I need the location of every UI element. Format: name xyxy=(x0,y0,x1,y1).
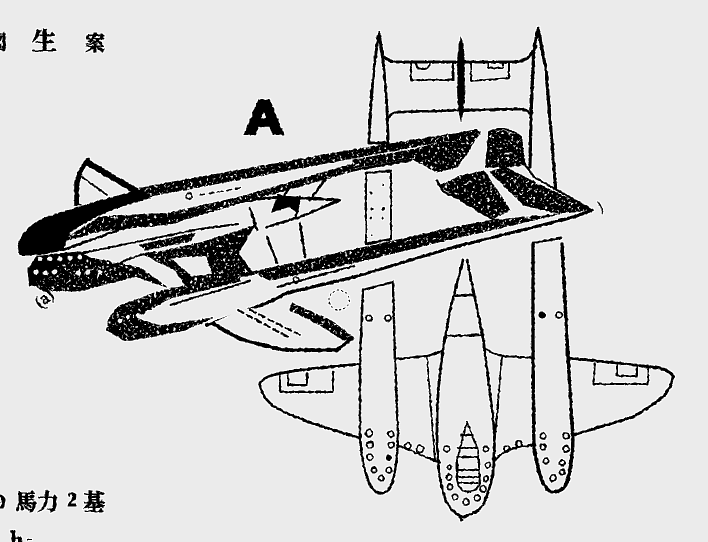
heading text fragment: 生 xyxy=(32,28,57,56)
heading text fragment: 案 xyxy=(85,32,105,55)
heading text fragment xyxy=(0,28,105,56)
perspective: far tail fin xyxy=(75,160,140,205)
caption text fragment: 2 xyxy=(67,489,77,511)
plan view: wings xyxy=(260,348,673,463)
label A: A xyxy=(245,91,283,143)
caption text fragment: 基 xyxy=(83,490,105,515)
perspective: upper boom and fuselage xyxy=(18,128,592,255)
mark (a): (a) xyxy=(31,285,57,312)
perspective: near wing xyxy=(213,290,352,350)
perspective view aircraft xyxy=(18,128,602,350)
perspective: central nacelle xyxy=(28,224,254,292)
plan view: engine booms xyxy=(360,238,573,493)
plan view: tail booms and stabilizer xyxy=(366,28,556,244)
perspective: near boom xyxy=(107,210,592,341)
plan view: central fuselage xyxy=(437,260,494,521)
caption text fragment: 馬力 xyxy=(15,490,59,515)
perspective: tail star and struts xyxy=(240,177,340,263)
caption text fragment xyxy=(0,489,105,542)
tip mark xyxy=(598,202,602,214)
plan view aircraft xyxy=(260,28,673,521)
